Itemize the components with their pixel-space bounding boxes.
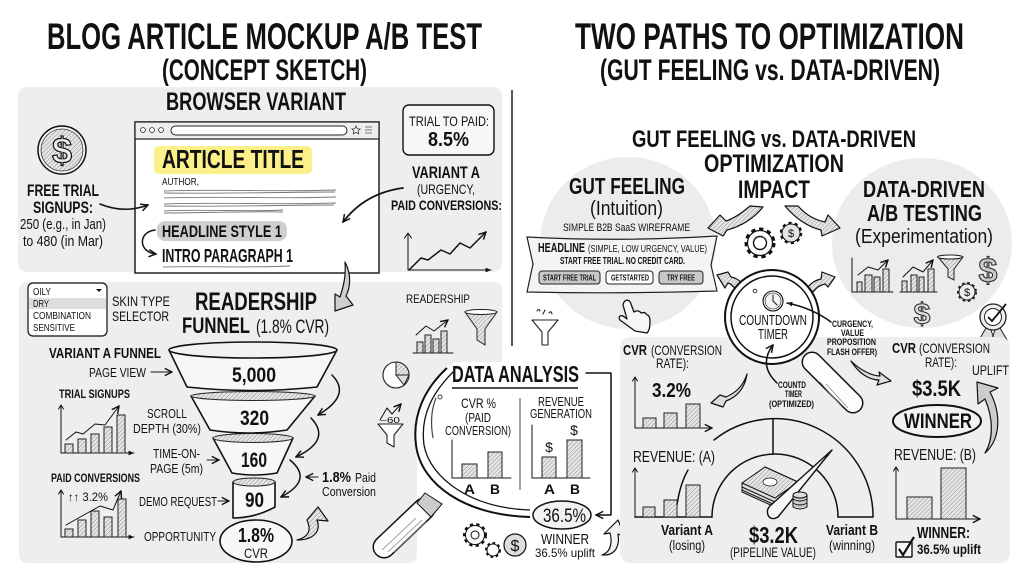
funnel stage labels: [89, 365, 229, 544]
chart: cvr variant a: 3.2%: [652, 380, 691, 402]
mini chart one: [852, 258, 893, 292]
arrow: magnifier to cvr a: [711, 374, 747, 407]
text: intro paragraph: INTRO PARAGRAPH 1: [162, 246, 293, 266]
text: variant a: PAID CONVERSIONS:: [391, 197, 502, 213]
text: countdown timer: [739, 312, 807, 343]
text: variant b winning: [826, 522, 878, 553]
callout: paid conversion: Conversion: [322, 484, 376, 499]
text: winner uplift with check: WINNER:: [917, 525, 970, 542]
text: variant a losing: [661, 522, 713, 553]
skin type dropdown: SENSITIVE: [33, 323, 75, 334]
wireframe banner: START FREE TRIAL. NO CREDIT CARD.: [560, 256, 685, 267]
title: blog article mockup: (CONCEPT SKETCH): [162, 54, 367, 87]
panel: results: [620, 337, 1010, 563]
chart: paid conversions: PAID CONVERSIONS: [51, 471, 140, 485]
text: variant a: VARIANT A: [412, 163, 480, 182]
text: cvr variant b: [892, 340, 990, 401]
button: try free: [659, 271, 703, 284]
heading: data analysis: DATA ANALYSIS: [452, 361, 579, 387]
heading: data-driven a/b testing: DATA-DRIVEN: [863, 176, 985, 202]
callout: paid conversion: [306, 469, 376, 499]
icon: pointing hand: [619, 300, 650, 333]
icon: small funnel with droplets: [532, 310, 558, 345]
icon: clock: [763, 291, 783, 311]
text: countdown timer: TIMER: [758, 326, 788, 343]
icons: gears: $: [788, 228, 794, 240]
funnel stage: 320: 320: [240, 407, 269, 430]
callout: trial to paid: 8.5%: [428, 129, 469, 151]
funnel stage labels: DEMO REQUEST: [139, 494, 217, 509]
icon: dollar coin: $: [52, 130, 72, 171]
funnel stage: 5,000: 5,000: [232, 364, 276, 387]
chart: cvr: CONVERSION): [445, 423, 511, 438]
skin type dropdown: OILY: [33, 287, 51, 298]
text: variant a funnel: VARIANT A FUNNEL: [49, 345, 161, 362]
arrow: callout to clock: [787, 303, 831, 322]
heading: data-driven a/b testing: (Experimentation): [855, 226, 993, 248]
icon: dollar gear: $: [964, 287, 970, 299]
callout: urgency value proposition: CURGENCY,: [832, 319, 873, 329]
chart: cvr variant a: RATE):: [656, 355, 689, 371]
icons: gears: [747, 224, 800, 256]
chart: trial signups: TRIAL SIGNUPS: [59, 387, 130, 401]
text: free trial signups: FREE TRIAL: [27, 181, 99, 200]
arrow: variant a to browser: [343, 188, 403, 222]
icon: dollar gear: [958, 284, 976, 300]
heading: gut feeling: (Intuition): [590, 198, 663, 220]
text: pipeline value: (PIPELINE VALUE): [730, 544, 816, 560]
callout: trial to paid: [403, 105, 494, 155]
mini chart two: [900, 260, 937, 292]
title: two paths to optimization: [575, 16, 964, 87]
callout: paid conversion: Paid: [355, 470, 376, 485]
heading: gut feeling: GUT FEELING: [569, 173, 685, 199]
funnel stage labels: OPPORTUNITY: [144, 529, 216, 544]
funnel stage: 5,000: [169, 342, 337, 390]
wireframe banner: HEADLINE: [538, 240, 585, 255]
arrows: funnel stage flow: [281, 375, 339, 497]
panel: data-driven circle: [832, 158, 1012, 342]
panel: readership funnel: [19, 262, 502, 563]
icon: funnel: [465, 310, 497, 345]
magnifier: countdown timer: [725, 270, 853, 408]
heading: gut feeling vs data-driven impact: GUT FEELING vs. DATA-DRIVEN: [632, 126, 916, 153]
icon: coin stack: [793, 492, 807, 509]
funnel stage labels: DEPTH (30%): [133, 421, 201, 436]
highlighted article title: ARTICLE TITLE: [162, 144, 304, 174]
text: variant a losing: Variant A: [661, 522, 713, 539]
gauge needle: [767, 450, 832, 519]
text: free trial signups: to 480 (in Mar): [23, 233, 103, 250]
icons: gears and coin: [465, 525, 526, 556]
text: skin type selector: SKIN TYPE: [112, 293, 170, 309]
title: blog article mockup: [47, 16, 482, 87]
chart: revenue b: REVENUE: (B): [894, 447, 976, 464]
headline style pill: HEADLINE STYLE 1: [162, 222, 282, 241]
arrow: headline to intro: [142, 230, 156, 254]
funnel result: 1.8% cvr: [220, 520, 292, 562]
text: variant a: [391, 163, 502, 213]
funnel stage labels: PAGE VIEW: [89, 365, 147, 380]
skin type dropdown: COMBINATION: [33, 311, 91, 322]
icon: funnel with arrow: −60: [380, 416, 401, 425]
heading: gut feeling vs data-driven impact: IMPACT: [738, 176, 810, 204]
skin type dropdown: DRY: [33, 299, 49, 310]
icon: pie chart: [383, 362, 409, 388]
chart: cvr: B: [490, 481, 500, 497]
funnel stage: 160: 160: [241, 449, 267, 472]
text: cvr variant b: (CONVERSION: [919, 340, 990, 356]
text: winner uplift: [535, 531, 596, 560]
arrows: impact to both circles: [708, 206, 840, 236]
heading: gut feeling: SIMPLE B2B SaaS WIREFRAME: [563, 222, 690, 234]
funnel stage: 90: [233, 478, 275, 518]
chart: revenue b: [894, 447, 980, 519]
arrow: signups to browser: [100, 204, 148, 209]
text: free trial signups: SIGNUPS:: [33, 198, 93, 217]
heading: gut feeling: [563, 173, 690, 234]
heading: browser variant: BROWSER VARIANT: [166, 88, 346, 116]
funnel stage: 90: 90: [245, 489, 264, 512]
text: free trial signups: 250 (e.g., in Jan): [20, 216, 106, 233]
callout: paid conversion: 1.8%: [322, 469, 351, 486]
gauge: [635, 419, 873, 517]
text: countd timer optimized: TIMER: [785, 389, 802, 399]
funnel stage labels: PAGE (5m): [150, 461, 203, 476]
arrow: hollow up from cvr: [297, 507, 328, 540]
heading: data-driven a/b testing: A/B TESTING: [867, 200, 982, 226]
arrow: analysis to uplift: [586, 373, 611, 515]
icon: funnel with arrow: [378, 404, 403, 447]
heading: readership funnel: [182, 288, 329, 338]
text: variant a losing: (losing): [669, 537, 705, 553]
wireframe banner: [527, 236, 717, 293]
icon: award rosette: [979, 304, 1007, 342]
text: winner uplift with check: 36.5% uplift: [917, 541, 981, 557]
icons: gears and coin: $: [511, 538, 520, 555]
line chart: paid conversions: [404, 232, 491, 270]
button: get started: [606, 271, 653, 284]
chart: revenue a: REVENUE: (A): [633, 449, 715, 466]
callout: urgency value proposition: PROPOSITION: [827, 337, 876, 347]
badge: winner: [893, 405, 981, 437]
text: countd timer optimized: (OPTIMIZED): [769, 399, 814, 409]
text: cvr variant b: RATE):: [925, 354, 957, 370]
chart: revenue generation: REVENUE: [538, 394, 584, 409]
funnel stage: 320: [191, 392, 315, 433]
title: blog article mockup: BLOG ARTICLE MOCKUP A/B TEST: [47, 16, 482, 57]
text: countdown timer: COUNTDOWN: [739, 312, 807, 329]
chart: revenue a: [632, 449, 715, 517]
icon: dollar large: $: [979, 252, 998, 290]
arrow: browser to funnel: [335, 262, 353, 311]
chart: revenue generation: $: [570, 422, 578, 438]
heading: readership funnel: (1.8% CVR): [256, 317, 329, 338]
arrow: hollow uplift: [977, 382, 998, 453]
wireframe banner: (SIMPLE, LOW URGENCY, VALUE): [588, 243, 707, 255]
heading: data-driven a/b testing: [855, 176, 993, 248]
button: start free trial: START FREE TRIAL: [543, 274, 596, 282]
text: variant b winning: Variant B: [826, 522, 878, 539]
callout: urgency value proposition: VALUE: [841, 328, 864, 338]
funnel diagram: [169, 342, 337, 562]
funnel stage: 160: [213, 434, 293, 475]
button: get started: GETSTARTED: [611, 274, 649, 282]
chart: revenue generation: B: [570, 481, 580, 497]
arrows: magnifier up to circles: [717, 272, 835, 292]
text: countd timer optimized: [769, 380, 814, 409]
icon: dollar sign: $: [914, 298, 931, 331]
text: winner uplift with check: [896, 525, 981, 557]
text: skin type selector: SELECTOR: [112, 308, 169, 324]
chart: revenue generation: A: [544, 481, 555, 497]
text: pipeline value: [730, 522, 816, 560]
button: start free trial: [539, 271, 600, 284]
text: skin type selector: [112, 293, 170, 324]
text: pipeline value: $3.2K: [749, 522, 798, 548]
chart: cvr variant a: (CONVERSION: [651, 342, 722, 358]
button: try free: TRY FREE: [667, 274, 695, 282]
text: uplift: UPLIFT: [972, 362, 1009, 378]
chart: cvr: A: [464, 481, 475, 497]
arrow: optimized timer up: [766, 345, 777, 383]
chart: revenue generation: [530, 394, 592, 497]
callout: trial to paid: TRIAL TO PAID:: [409, 113, 489, 129]
heading: data analysis: [452, 361, 579, 388]
chart: revenue generation: $: [545, 439, 553, 455]
mini chart: readership: [413, 320, 453, 353]
magnifier lens and handle: [382, 368, 530, 552]
arrow: callout to results b: [851, 361, 891, 385]
arrow: hollow uplift: [602, 520, 625, 555]
text: variant a: (URGENCY,: [417, 181, 475, 197]
callout: urgency value proposition: FLASH OFFER): [827, 347, 877, 357]
chart: cvr variant a: CVR: [623, 342, 647, 359]
text: readership: READERSHIP: [406, 292, 470, 306]
funnel stage labels: SCROLL: [147, 406, 187, 421]
text: cvr variant b: $3.5K: [912, 376, 961, 401]
panel: data analysis magnifier: [382, 361, 625, 560]
text: countd timer optimized: COUNTD: [778, 380, 806, 390]
chart: cvr: [445, 395, 511, 497]
text: winner uplift: 36.5% uplift: [535, 546, 596, 560]
heading: gut feeling vs data-driven impact: [632, 126, 916, 204]
text: free trial signups: [20, 181, 106, 250]
chart: cvr variant a: [623, 342, 722, 428]
icon: money stack: [742, 467, 798, 507]
text: variant b winning: (winning): [829, 537, 875, 553]
badge: 36.5%: 36.5%: [543, 506, 586, 527]
icon: dollar coin: [38, 126, 86, 174]
chart: paid conversions: [51, 471, 140, 537]
funnel result: 1.8% cvr: 1.8%: [238, 525, 274, 547]
chart: trial signups: [58, 387, 134, 453]
chart: cvr: CVR %: [461, 395, 496, 411]
callout: urgency value proposition: [827, 319, 877, 357]
heading: readership funnel: FUNNEL: [182, 313, 250, 338]
text: author: AUTHOR,: [162, 177, 199, 188]
text: cvr variant b: CVR: [892, 340, 916, 357]
badge: winner: WINNER: [904, 410, 972, 433]
icon: funnel: [938, 255, 963, 280]
panel: gut feeling circle: [527, 157, 717, 333]
chart: cvr: (PAID: [465, 410, 491, 425]
funnel stage labels: TIME-ON-: [153, 446, 200, 461]
chart: paid conversions: ↑↑ 3.2%: [68, 490, 108, 504]
heading: readership funnel: READERSHIP: [195, 288, 317, 316]
browser window mockup: [135, 122, 379, 273]
text: winner uplift: WINNER: [541, 531, 589, 548]
skin type dropdown: [28, 283, 107, 336]
heading: gut feeling vs data-driven impact: OPTIMIZATION: [704, 150, 844, 178]
chart: revenue generation: GENERATION: [530, 406, 592, 421]
funnel result: 1.8% cvr: CVR: [244, 545, 268, 561]
badge: 36.5%: [533, 501, 591, 529]
